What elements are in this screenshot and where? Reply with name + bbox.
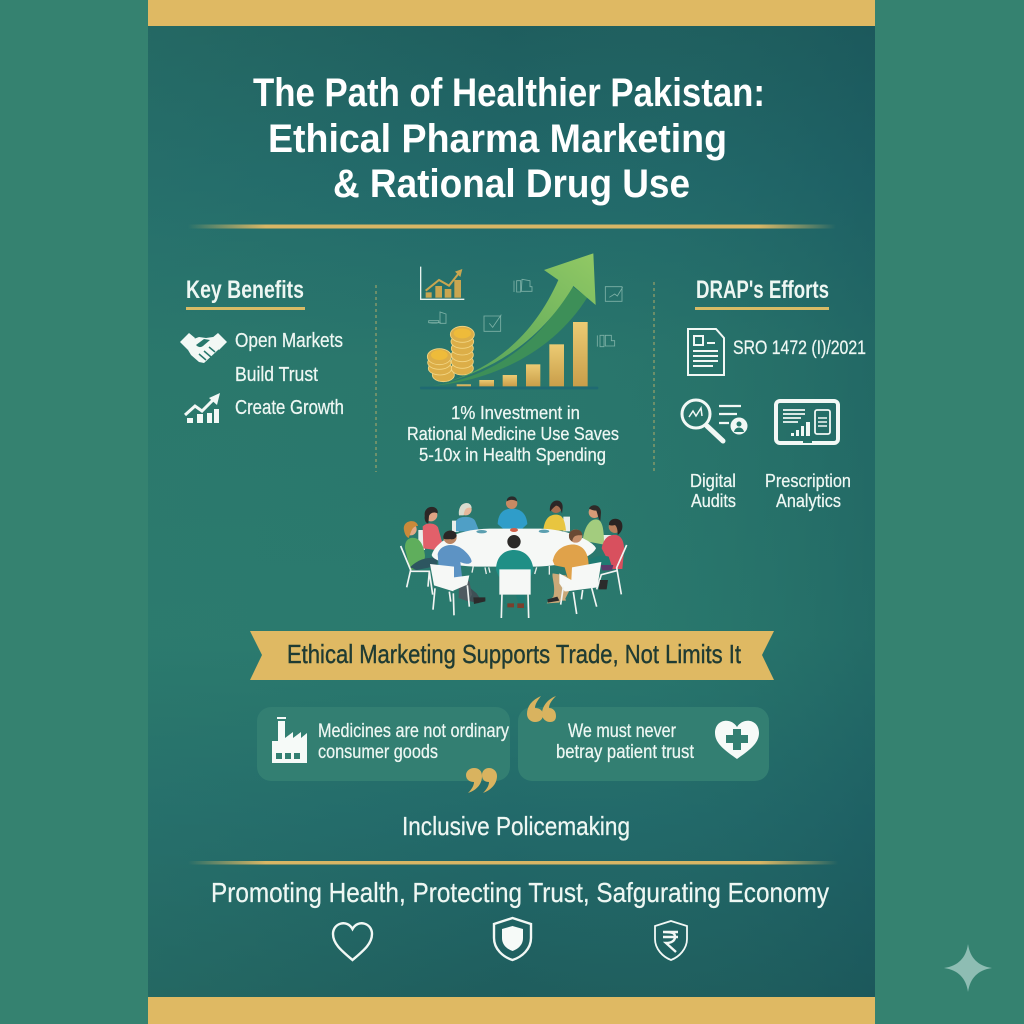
text: digital audits: Digital [690, 471, 736, 491]
panel: key benefits [180, 276, 344, 423]
back-row people [404, 496, 624, 571]
icon: small chart [421, 267, 464, 299]
title: Ethical Pharma Marketing [268, 117, 727, 161]
icon: shield [494, 918, 531, 960]
icon: sparkle [944, 944, 992, 992]
central panel [148, 0, 875, 1024]
text: medicines: Medicines are not ordinary [318, 721, 509, 742]
illustration: round table meeting [401, 496, 627, 618]
icon: opening quote mark [527, 696, 556, 722]
heading: DRAP's efforts: DRAP's Efforts [696, 276, 829, 304]
icon: heart with cross [715, 721, 759, 759]
text: prescription analytics: Analytics [776, 491, 841, 511]
icon: heart outline [333, 923, 372, 960]
text: investment caption: Rational Medicine Use Saves [407, 424, 619, 444]
title: & Rational Drug Use [333, 162, 690, 206]
chart: investment growth [420, 253, 623, 389]
tagline: Promoting Health, Protecting Trust, Safgurating Economy [211, 877, 829, 908]
text: build trust: Build Trust [235, 364, 318, 386]
text: open markets: Open Markets [235, 330, 343, 352]
bottom gold band [148, 997, 875, 1024]
icon: prescription analytics [776, 401, 838, 443]
icon: factory [272, 717, 307, 763]
title: The Path of Healthier Pakistan: [253, 71, 765, 115]
heading: key benefits: Key Benefits [186, 276, 304, 304]
bars [457, 322, 588, 386]
card: patient trust quote [518, 707, 769, 781]
text: inclusive policemaking: Inclusive Policemaking [402, 811, 630, 841]
icon: document [688, 329, 724, 375]
top gold band [148, 0, 875, 26]
heading: DRAP's efforts [695, 276, 829, 310]
text: investment caption: 1% Investment in [451, 403, 580, 423]
text: medicines [318, 721, 509, 763]
banner [250, 631, 774, 680]
faint icons [429, 279, 623, 347]
text: investment caption [407, 403, 619, 465]
text: medicines: consumer goods [318, 742, 438, 763]
baseline [420, 387, 598, 389]
text: digital audits: Audits [691, 491, 736, 511]
text: patient trust [556, 721, 695, 763]
text: create growth: Create Growth [235, 397, 344, 419]
icon: growth chart [185, 393, 220, 423]
icon: digital audits [682, 400, 748, 441]
text: SRO reference: SRO 1472 (I)/2021 [733, 338, 866, 359]
heading: key benefits [186, 276, 305, 310]
title [253, 71, 765, 206]
panel: DRAP's efforts [682, 276, 866, 511]
icon: handshake [180, 333, 227, 363]
icon: rupee shield [655, 921, 687, 960]
arrow [432, 253, 596, 386]
banner text: Ethical Marketing Supports Trade, Not Limits It [287, 639, 742, 669]
front-row people [430, 529, 608, 618]
side chairs [401, 545, 627, 595]
table [432, 528, 596, 575]
text: investment caption: 5-10x in Health Spending [419, 445, 606, 465]
card: medicines quote [257, 707, 510, 781]
text: prescription analytics [765, 471, 851, 511]
text: patient trust: We must never [568, 721, 677, 742]
icon: closing quote mark [466, 768, 497, 793]
text: patient trust: betray patient trust [556, 742, 695, 763]
text: digital audits [690, 471, 736, 511]
text: prescription analytics: Prescription [765, 471, 851, 491]
coins [427, 326, 474, 382]
